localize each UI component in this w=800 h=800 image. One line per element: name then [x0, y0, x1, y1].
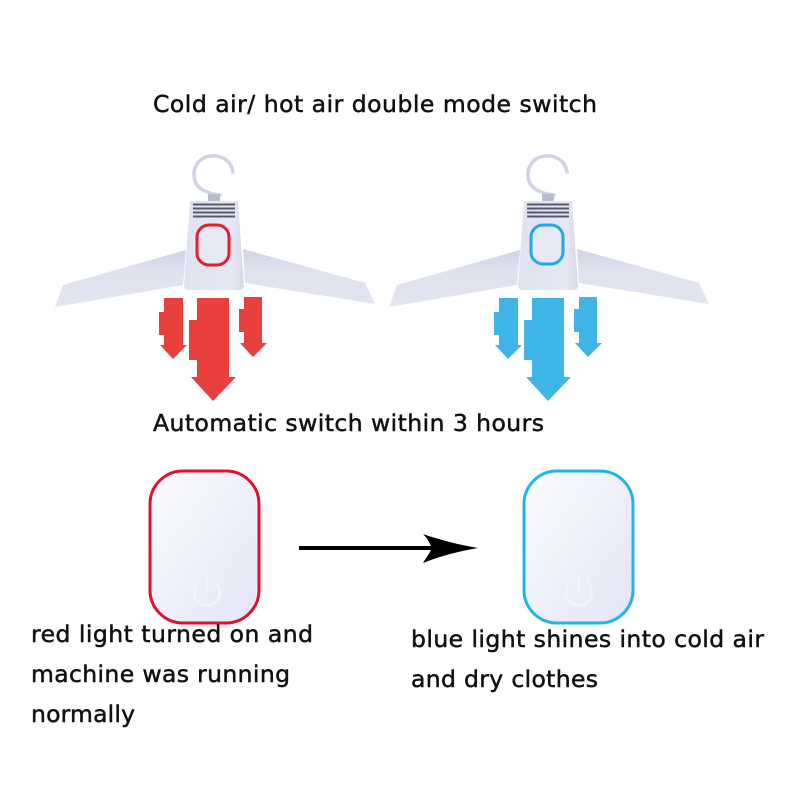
large centre arrow: [524, 298, 571, 401]
hook: [194, 156, 233, 195]
hanger body: [184, 201, 244, 290]
left wing: [389, 250, 520, 307]
blue indicator ring: [531, 225, 563, 264]
small right arrow: [239, 297, 267, 357]
caption: red light: [31, 620, 313, 728]
hook neck: [208, 194, 220, 201]
heading: automatic switch: Automatic switch within 3 hours: [153, 409, 544, 437]
right wing: [243, 249, 375, 304]
hanger with red hot-air arrows: [55, 156, 375, 401]
hook: [528, 156, 567, 195]
small left arrow: [494, 298, 522, 359]
icon: power button: [566, 576, 592, 605]
hanger body: [518, 201, 578, 290]
vent grille: [193, 204, 235, 216]
hook neck: [542, 194, 554, 201]
caption: blue light: [411, 625, 764, 693]
caption: red light: machine was running: [31, 660, 290, 688]
caption: blue light: and dry clothes: [411, 665, 598, 693]
icon: power button: [194, 576, 220, 605]
hanger with blue cold-air arrows: [389, 156, 709, 401]
heading: double mode switch: Cold air/ hot air double mode switch: [153, 90, 597, 118]
vent grille: [527, 204, 569, 216]
blue control panel: [524, 471, 633, 623]
caption: red light: red light turned on and: [31, 620, 313, 648]
left wing: [55, 250, 186, 307]
caption: red light: normally: [31, 700, 135, 728]
red indicator ring: [197, 225, 229, 265]
right wing: [577, 249, 709, 304]
large centre arrow: [189, 298, 236, 401]
red control panel: [150, 471, 259, 623]
caption: blue light: blue light shines into cold air: [411, 625, 764, 653]
panel body: [150, 471, 259, 623]
panel body: [524, 471, 633, 623]
arrow: red to blue: [299, 534, 478, 563]
small left arrow: [159, 298, 187, 359]
small right arrow: [574, 297, 602, 357]
